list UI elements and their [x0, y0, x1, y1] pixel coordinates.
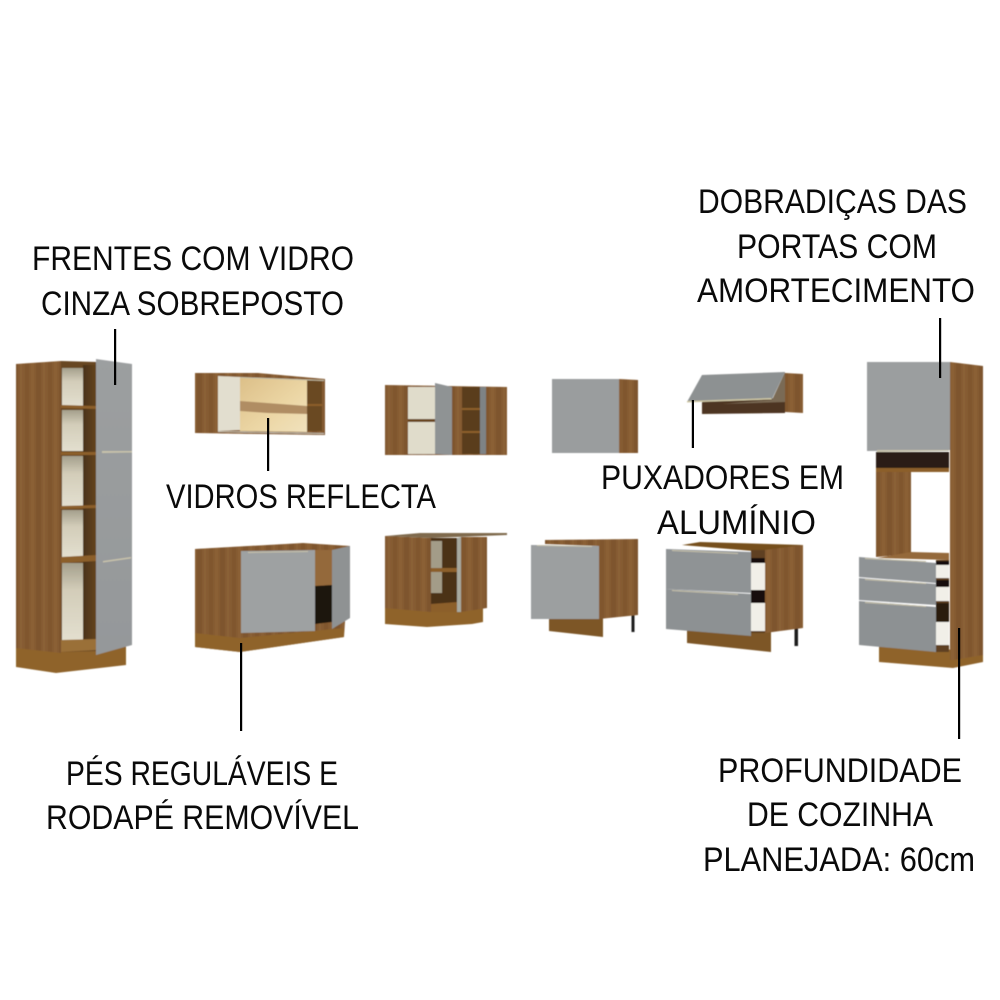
label: frentes com vidro: [32, 240, 354, 323]
label: frentes com vidro: CINZA SOBREPOSTO: [41, 285, 344, 323]
label: pés reguláveis: RODAPÉ REMOVÍVEL: [46, 799, 359, 837]
label: dobradiças: PORTAS COM: [737, 228, 937, 266]
cabinet: tall oven housing with drawers: [859, 362, 983, 668]
label: puxadores: PUXADORES EM: [601, 459, 844, 497]
leader line: profundidade: [958, 628, 960, 739]
leader line: pés: [240, 643, 242, 731]
cabinet: wall unit with lift-up door: [687, 372, 803, 414]
label: profundidade: DE COZINHA: [747, 796, 933, 834]
label: profundidade: PLANEJADA: 60cm: [703, 841, 975, 879]
label: frentes com vidro: FRENTES COM VIDRO: [32, 240, 354, 278]
cabinet: base unit with two doors: [195, 543, 350, 652]
label: vidros reflecta: VIDROS REFLECTA: [166, 478, 436, 516]
label: dobradiças: [697, 183, 975, 310]
leader line: puxadores: [692, 400, 694, 448]
label: pés reguláveis: PÉS REGULÁVEIS E: [66, 755, 338, 793]
label: profundidade: PROFUNDIDADE: [718, 752, 962, 790]
label: puxadores: ALUMÍNIO: [657, 504, 816, 542]
label: dobradiças: DOBRADIÇAS DAS: [698, 183, 967, 221]
cabinet: corner base unit: [385, 533, 507, 627]
leader line: vidros: [267, 418, 269, 471]
label: dobradiças: AMORTECIMENTO: [697, 272, 975, 310]
cabinet: drawer base unit: [666, 542, 803, 652]
label: profundidade: [703, 752, 975, 879]
cabinet: base unit with grey door: [531, 539, 638, 637]
cabinet: tall pantry with open doors: [16, 359, 132, 673]
label: pés reguláveis: [46, 755, 359, 837]
cabinet: wall unit with sliding glass: [195, 373, 325, 435]
cabinet: wall unit with grey door: [552, 379, 638, 453]
leader line: dobradiças: [939, 318, 941, 378]
leader line: frentes: [114, 329, 116, 385]
cabinet: corner wall unit: [385, 383, 507, 455]
label: puxadores: [601, 459, 844, 542]
